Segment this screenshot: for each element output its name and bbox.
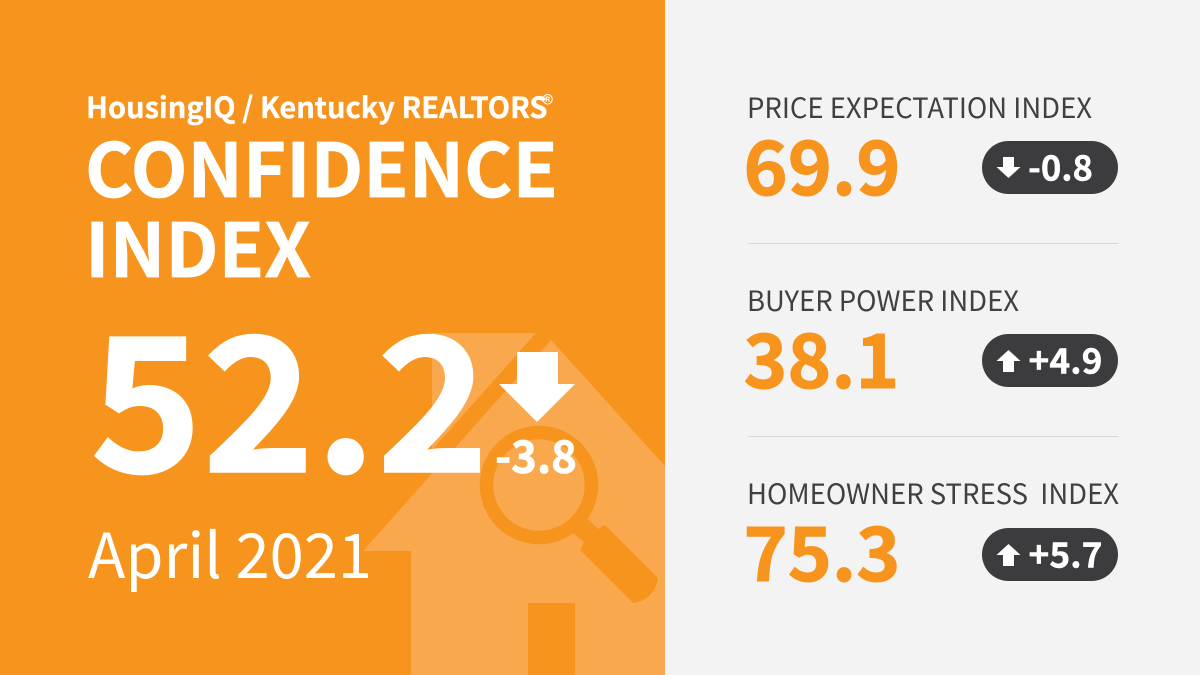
metric: homeowner stress index: HOMEOWNER STRESS INDEX xyxy=(747,473,1119,513)
metric: buyer power index: BUYER POWER INDEX xyxy=(747,280,1019,320)
badge: up 5.7: +5.7 xyxy=(1028,528,1102,578)
badge: up 4.9 xyxy=(982,334,1118,387)
badge: down 0.8 xyxy=(982,140,1118,194)
metric: buyer power index xyxy=(744,280,1118,410)
text: subtitle: ® xyxy=(542,85,553,120)
heading: confidence: CONFIDENCE xyxy=(85,112,558,219)
badge: up 5.7 xyxy=(982,528,1118,581)
icon: main down arrow xyxy=(499,352,575,422)
text: subtitle: HousingIQ / Kentucky REALTORS xyxy=(86,85,548,127)
panel: light grey right background xyxy=(665,0,1200,675)
text: date: April 2021 xyxy=(88,506,372,596)
badge: up 4.9: +4.9 xyxy=(1028,334,1102,384)
panel: orange left background xyxy=(0,0,665,675)
metric: buyer power index: 38.1 xyxy=(744,301,900,410)
badge: down 0.8: -0.8 xyxy=(1028,140,1093,192)
main value: 52.2 xyxy=(90,255,489,526)
main change value: -3.8 xyxy=(495,421,577,486)
metric: homeowner stress index: 75.3 xyxy=(744,494,900,603)
metric: homeowner stress index xyxy=(744,473,1119,603)
metric: price expectation index xyxy=(744,87,1118,217)
icon: house with magnifying glass xyxy=(363,333,665,675)
metric: price expectation index: PRICE EXPECTATION INDEX xyxy=(747,87,1092,127)
metric: price expectation index: 69.9 xyxy=(744,108,900,217)
heading: index: INDEX xyxy=(85,192,311,299)
